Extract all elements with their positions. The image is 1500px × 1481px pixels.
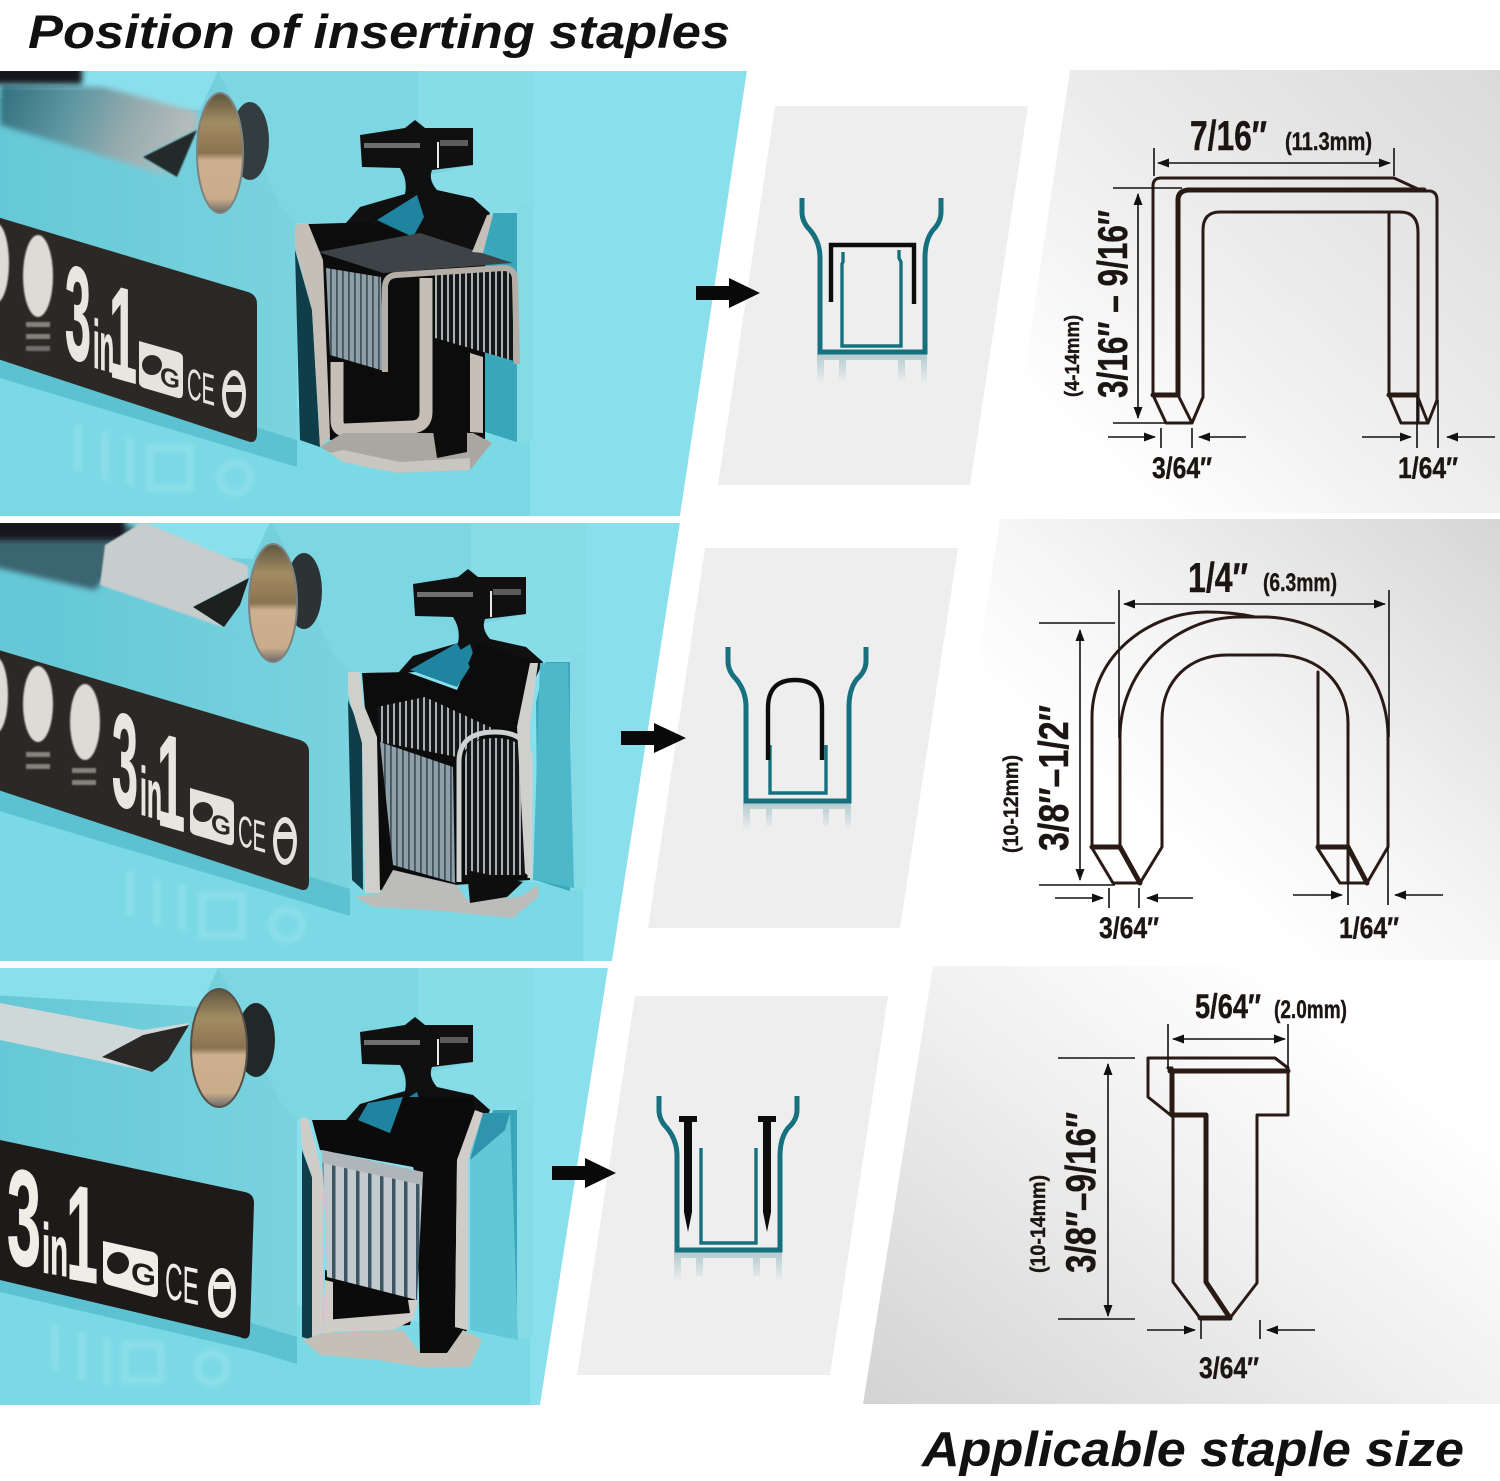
blue column right xyxy=(470,1113,518,1340)
staple arrow 2 xyxy=(621,723,686,753)
dimension labels 1: 3/16″ – 9/16″ xyxy=(1089,210,1136,398)
rivet button xyxy=(191,989,275,1107)
black label plate xyxy=(0,648,309,890)
3in1 logo: 3 xyxy=(7,1140,41,1298)
stapler body xyxy=(0,968,533,1417)
dimension labels 1 xyxy=(1062,112,1458,485)
dimension labels 2: (6.3mm) xyxy=(1263,569,1337,597)
label icons round xyxy=(0,657,100,785)
3in1 logo xyxy=(112,713,184,832)
dimension labels 2 xyxy=(1000,554,1399,945)
stapler body xyxy=(0,520,586,969)
staple arrow 3 xyxy=(552,1158,616,1188)
reflection of label xyxy=(130,872,302,940)
caption: applicable staple size: Applicable staple size xyxy=(921,1423,1464,1477)
magazine interior xyxy=(302,1097,475,1353)
3in1 logo xyxy=(66,266,136,384)
certification marks: CE xyxy=(187,358,215,416)
3in1 logo: in xyxy=(140,752,162,835)
magazine tray xyxy=(303,1330,482,1368)
rivet button xyxy=(197,93,269,213)
dimension lines 1 xyxy=(1108,148,1495,448)
dimension labels 3 xyxy=(1027,988,1347,1385)
certification marks: CE xyxy=(238,805,266,863)
black label plate xyxy=(0,200,257,442)
staple drawing: flat crown xyxy=(1153,178,1437,423)
top black band xyxy=(0,518,125,540)
3in1 logo: in xyxy=(93,305,114,388)
magazine tray xyxy=(320,431,492,473)
panel: diagram background 1 xyxy=(718,106,1028,485)
label icons round xyxy=(0,223,53,351)
dimension labels 3: (2.0mm) xyxy=(1274,996,1347,1024)
channel reflection xyxy=(817,354,927,384)
stapler body xyxy=(0,71,533,520)
panel: photo of staple position 3: 1 xyxy=(66,1156,98,1313)
metal magazine channel xyxy=(348,663,538,893)
dimension labels 2: 1/64″ xyxy=(1339,912,1399,945)
channel reflection xyxy=(674,1252,782,1282)
chrome handle strip xyxy=(0,1003,189,1072)
dimension labels 1: 1/64″ xyxy=(1398,452,1458,485)
metal magazine channel xyxy=(295,215,493,447)
chrome handle strip xyxy=(100,522,248,628)
diagram: round staple in channel xyxy=(728,647,866,830)
staple drawing: round crown xyxy=(1092,612,1388,883)
nail drawing: T-head xyxy=(1148,1058,1288,1318)
arched staple stack xyxy=(377,697,530,883)
dimension labels 3: 5/64″ xyxy=(1195,988,1261,1026)
staple arrow 1 xyxy=(696,278,760,308)
black column xyxy=(435,340,470,458)
panel: photo of staple position 1 xyxy=(0,66,747,520)
title: Position of inserting staples xyxy=(28,5,730,58)
panel: photo of staple position 2: 1 xyxy=(157,703,185,860)
channel reflection xyxy=(743,803,851,830)
dark top band xyxy=(0,66,82,84)
dimension lines 3 xyxy=(1058,1024,1315,1339)
dimension labels 1: (11.3mm) xyxy=(1285,128,1372,156)
certification marks: G xyxy=(160,360,180,396)
reflection of label xyxy=(78,425,250,493)
diagram: flat staple in channel xyxy=(802,198,941,384)
3in1 logo: 3 xyxy=(65,235,91,392)
right column xyxy=(533,663,574,888)
dimension labels 2: 3/64″ xyxy=(1099,912,1159,945)
nail stack xyxy=(322,1150,423,1300)
panel: photo of staple position 3 xyxy=(0,968,608,1417)
reflection of label xyxy=(55,1325,227,1385)
rivet button xyxy=(249,544,322,662)
lower body band xyxy=(0,1272,300,1362)
panel: staple size 2 background xyxy=(933,519,1500,960)
certification marks xyxy=(139,341,246,418)
dimension lines 2 xyxy=(1039,590,1443,908)
panel: photo of staple position 2 xyxy=(0,518,680,969)
dimension labels 2: (10-12mm) xyxy=(1000,755,1023,853)
3in1 logo: in xyxy=(42,1208,68,1291)
metal magazine channel xyxy=(300,1110,483,1337)
magazine interior xyxy=(295,222,485,447)
dimension labels 1: (4-14mm) xyxy=(1062,315,1084,397)
dimension labels 3: 3/8″–9/16″ xyxy=(1057,1112,1104,1273)
certification marks: CE xyxy=(165,1252,199,1317)
certification marks: G xyxy=(131,1256,156,1294)
dimension labels 2: 3/8″–1/2″ xyxy=(1030,705,1077,851)
panel: diagram background 2 xyxy=(648,548,958,928)
3in1 logo: 3 xyxy=(112,682,138,839)
panel: staple size 1 background xyxy=(1003,70,1500,513)
front staple outline xyxy=(385,268,517,372)
certification marks xyxy=(103,1241,236,1318)
black wedge shadow xyxy=(143,130,197,177)
magazine interior xyxy=(348,643,530,890)
flat staple stack xyxy=(318,233,514,371)
black wedge shadow xyxy=(102,1025,189,1072)
dimension labels 3: (10-14mm) xyxy=(1027,1175,1050,1273)
panel: staple size 3 background xyxy=(863,966,1500,1404)
dimension labels 1: 3/64″ xyxy=(1152,452,1212,485)
dimension labels 1: 7/16″ xyxy=(1190,112,1267,159)
panel: diagram background 3 xyxy=(577,996,888,1375)
black wedge shadow xyxy=(193,578,249,627)
blurred handle strip xyxy=(0,85,197,177)
magazine tray xyxy=(355,870,538,918)
certification marks xyxy=(190,788,297,865)
diagram: nails in channel xyxy=(659,1096,797,1282)
blurred dark band xyxy=(0,525,135,590)
certification marks: G xyxy=(211,807,231,843)
dimension labels 2: 1/4″ xyxy=(1188,554,1248,601)
dimension labels 3: 3/64″ xyxy=(1199,1352,1259,1385)
black label plate xyxy=(0,1140,254,1338)
panel: photo of staple position 1: 1 xyxy=(109,255,137,412)
